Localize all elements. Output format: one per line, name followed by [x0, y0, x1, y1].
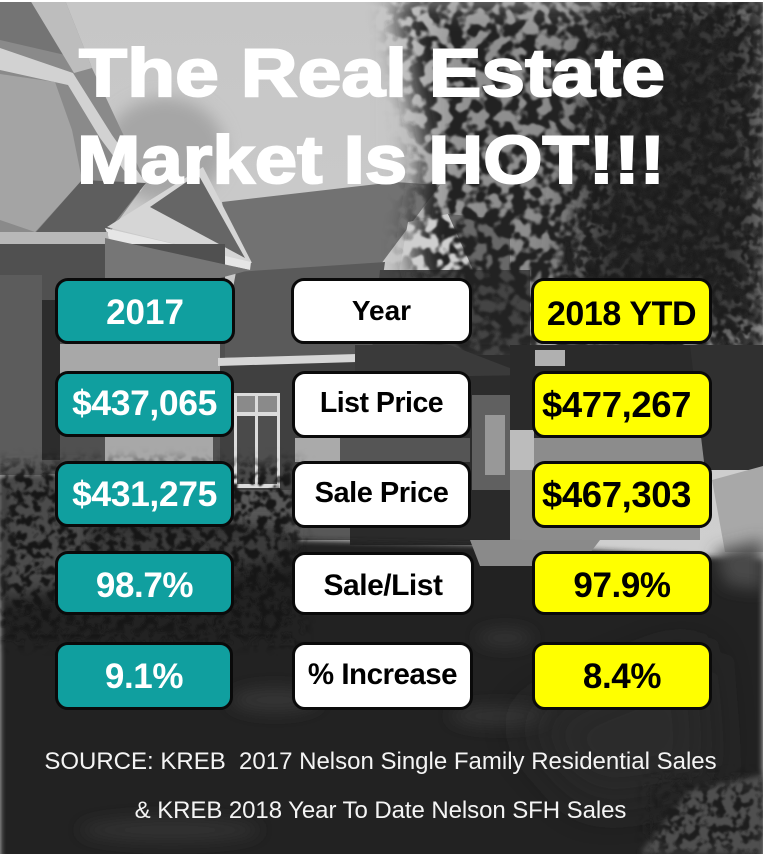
2017 sale price: $431,275 [72, 474, 217, 514]
right tree mass [430, 0, 763, 330]
2018 increase [532, 642, 712, 710]
2018 year: 2018 YTD [547, 294, 696, 332]
title [77, 35, 665, 198]
label increase [292, 642, 473, 710]
2018 list price: $477,267 [542, 384, 691, 424]
title: The Real Estate [79, 35, 665, 111]
top left house gable [0, 0, 146, 232]
house body and windows [220, 362, 355, 492]
2017 sale to list [55, 551, 234, 615]
source line 2: & KREB 2018 Year To Date Nelson SFH Sales [135, 797, 626, 824]
2018 sale to list [532, 551, 712, 615]
2017 increase: 9.1% [105, 657, 183, 696]
label sale to list: Sale/List [324, 569, 442, 602]
2017 year: 2017 [106, 293, 184, 332]
2017 list price: $437,065 [72, 382, 217, 422]
foliage over sky [395, 0, 763, 360]
left wall [0, 244, 225, 474]
label increase: % Increase [308, 658, 457, 691]
source note [44, 748, 717, 824]
2017 sale price [55, 461, 234, 527]
title: Market Is HOT!!! [77, 122, 665, 198]
2017 list price [55, 371, 234, 437]
2017 increase [55, 642, 233, 710]
ground and shrubs [0, 478, 763, 860]
label list price: List Price [320, 386, 443, 418]
central roof [222, 182, 440, 276]
2018 year [531, 278, 712, 344]
2017 sale to list: 98.7% [96, 566, 193, 605]
blurred distant tree [105, 98, 225, 202]
label year [291, 278, 472, 344]
2018 sale to list: 97.9% [573, 566, 671, 605]
porch gable [107, 167, 252, 263]
2018 increase: 8.4% [583, 657, 661, 696]
2018 sale price: $467,303 [542, 474, 691, 514]
source line 1: SOURCE: KREB 2017 Nelson Single Family Residential Sales [44, 748, 717, 775]
2018 sale price [532, 461, 712, 528]
far gable [398, 214, 474, 278]
label sale to list [292, 552, 474, 615]
right side background houses [510, 345, 763, 445]
label list price [292, 371, 471, 438]
label sale price [292, 461, 471, 528]
2018 list price [532, 371, 712, 438]
2017 year [55, 278, 235, 344]
grass highlights [230, 688, 320, 712]
label year: Year [352, 295, 411, 326]
label sale price: Sale Price [315, 476, 448, 508]
